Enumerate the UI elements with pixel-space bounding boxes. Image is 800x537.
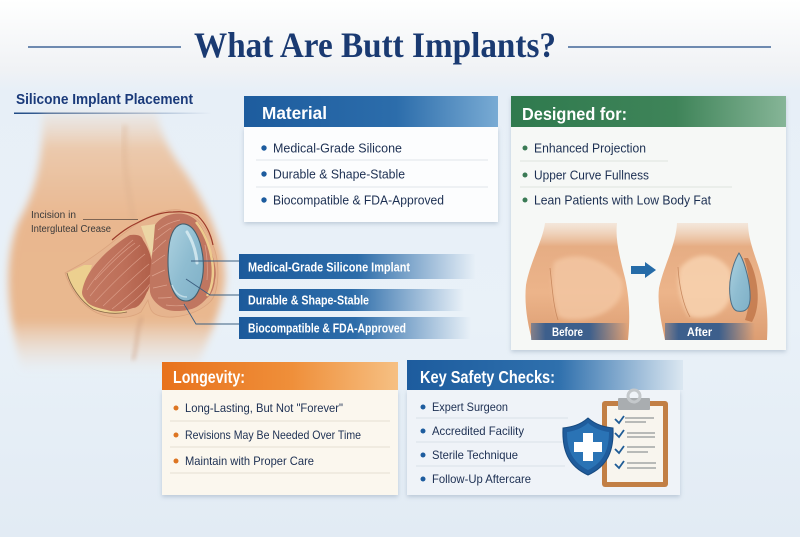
panel: designed for: Enhanced Projection: [534, 142, 646, 156]
skin rim of the cutaway: [65, 210, 218, 317]
before image: Before: [552, 327, 583, 339]
panel: material: Biocompatible & FDA-Approved: [273, 194, 444, 208]
after image: After: [687, 327, 712, 339]
heading: silicone implant placement: Silicone Implant Placement: [16, 92, 193, 108]
heading: key safety checks: Key Safety Checks:: [420, 367, 555, 387]
title: What Are Butt Implants?: [194, 25, 556, 65]
label: incision: Incision in: [31, 210, 76, 221]
implant: [168, 224, 203, 301]
panel: designed for: [511, 96, 786, 350]
left cutaway: fat and muscle: [67, 224, 156, 313]
panel: key safety checks: [407, 360, 683, 495]
implant in after view: [730, 253, 750, 311]
label: incision: Intergluteal Crease: [31, 224, 111, 235]
label: incision: [31, 210, 138, 235]
panel: longevity: Maintain with Proper Care: [185, 454, 314, 468]
callout bars: [239, 254, 476, 339]
panel: key safety checks: Follow-Up Aftercare: [432, 472, 531, 486]
panel: material: [244, 96, 498, 222]
panel: key safety checks: Expert Surgeon: [432, 400, 508, 414]
before image: [525, 223, 629, 340]
panel: material: Medical-Grade Silicone: [273, 142, 402, 156]
icon: shield with cross: [563, 418, 613, 475]
heading: longevity: Longevity:: [173, 367, 245, 387]
callout bars: Durable & Shape-Stable: [248, 294, 369, 308]
panel: longevity: [162, 362, 398, 495]
arrow: [631, 262, 656, 278]
panel: material: Durable & Shape-Stable: [273, 168, 405, 182]
callout bars: Biocompatible & FDA-Approved: [248, 322, 406, 336]
heading: material: Material: [262, 103, 327, 123]
after image: [659, 223, 767, 340]
panel: key safety checks: Sterile Technique: [432, 448, 518, 462]
panel: designed for: Lean Patients with Low Body Fat: [534, 194, 711, 208]
callout bars: Medical-Grade Silicone Implant: [248, 260, 411, 274]
panel: silicone implant placement: [9, 92, 239, 372]
leader lines: [184, 261, 239, 324]
heading: designed for: Designed for:: [522, 104, 627, 124]
icon: clipboard: [602, 390, 668, 487]
illustration: anatomical cross-section: [9, 112, 239, 372]
panel: longevity: Long-Lasting, But Not "Forever": [185, 401, 343, 415]
incision line: [112, 212, 213, 245]
panel: key safety checks: Accredited Facility: [432, 424, 524, 438]
right cutaway: muscle layer: [150, 213, 216, 311]
panel: longevity: Revisions May Be Needed Over Time: [185, 428, 361, 442]
panel: designed for: Upper Curve Fullness: [534, 168, 649, 182]
